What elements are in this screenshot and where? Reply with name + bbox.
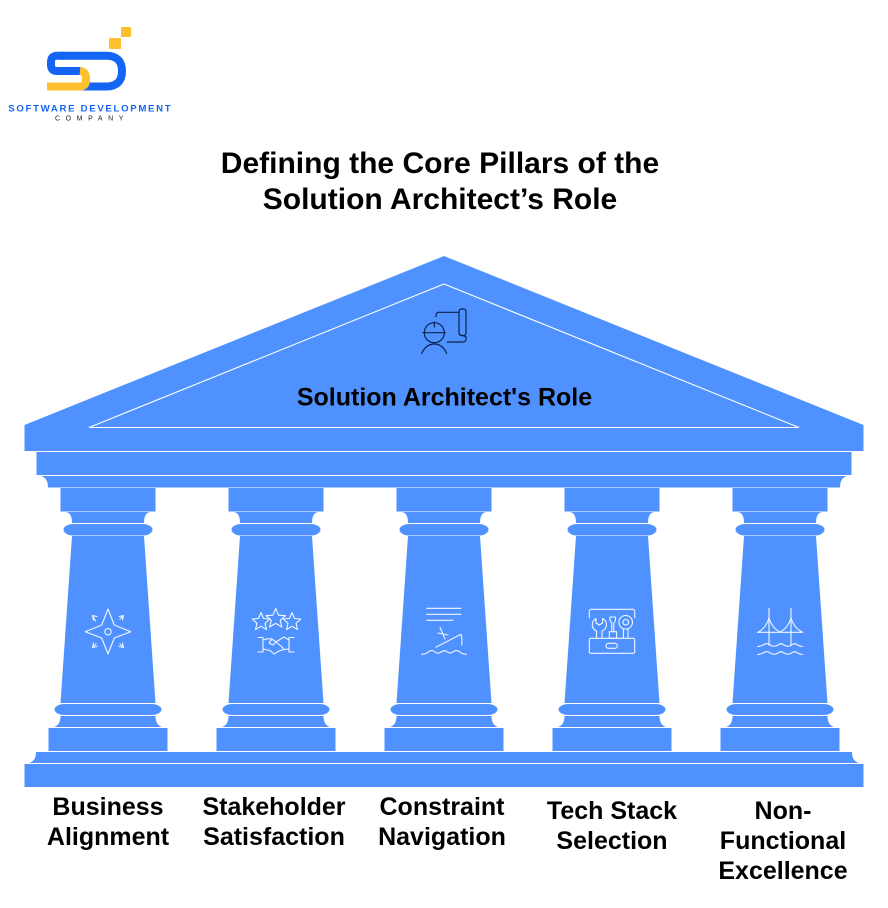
roof pediment — [24, 256, 864, 451]
pillar 4 — [552, 488, 672, 751]
title: Defining the Core Pillars of the — [221, 147, 659, 180]
icon: compass star — [85, 609, 131, 654]
label: Stakeholder Satisfaction — [202, 793, 346, 851]
label: Constraint Navigation: Constraint — [380, 793, 505, 821]
pillar 2 — [216, 488, 336, 751]
entablature band — [36, 452, 852, 475]
label: Stakeholder Satisfaction: Stakeholder — [202, 793, 346, 821]
label: Tech Stack Selection: Selection — [556, 827, 668, 855]
label: Non-Functional Excellence: Excellence — [718, 857, 848, 885]
logo: Software Development Company — [8, 27, 172, 122]
pediment inner outline — [89, 284, 799, 428]
logo wordmark: SOFTWARE DEVELOPMENT — [8, 104, 172, 114]
heading: Solution Architect's Role: Solution Architect's Role — [297, 384, 592, 412]
title — [221, 147, 659, 216]
label: Constraint Navigation: Navigation — [378, 823, 506, 851]
label: Stakeholder Satisfaction: Satisfaction — [203, 823, 345, 851]
pillar 1 — [48, 488, 168, 751]
icon: toolbox — [589, 609, 635, 653]
logo tagline: COMPANY — [55, 116, 129, 122]
icon: suspension bridge — [758, 608, 803, 654]
temple illustration — [24, 256, 864, 787]
stylobate upper step — [29, 752, 859, 763]
title: Solution Architect’s Role — [263, 183, 617, 216]
label: Tech Stack Selection — [547, 797, 677, 855]
label: Non-Functional Excellence — [718, 797, 848, 885]
label: Business Alignment — [47, 793, 170, 851]
icon: architect with blueprint — [422, 309, 466, 354]
icon: sinking ship — [422, 608, 466, 654]
label: Constraint Navigation — [378, 793, 506, 851]
stylobate lower step — [24, 764, 864, 787]
label: Business Alignment: Alignment — [47, 823, 170, 851]
pillar 3 — [384, 488, 504, 751]
entablature moulding — [41, 476, 847, 488]
label: Non-Functional Excellence: Non- — [755, 797, 811, 825]
icon: stars and handshake — [252, 608, 301, 654]
label: Non-Functional Excellence: Functional — [720, 827, 846, 855]
label: Business Alignment: Business — [52, 793, 164, 821]
pillar 5 — [720, 488, 840, 751]
logo icon: yellow squares — [109, 27, 131, 49]
logo icon: SD monogram — [47, 56, 122, 86]
label: Tech Stack Selection: Tech Stack — [547, 797, 677, 825]
